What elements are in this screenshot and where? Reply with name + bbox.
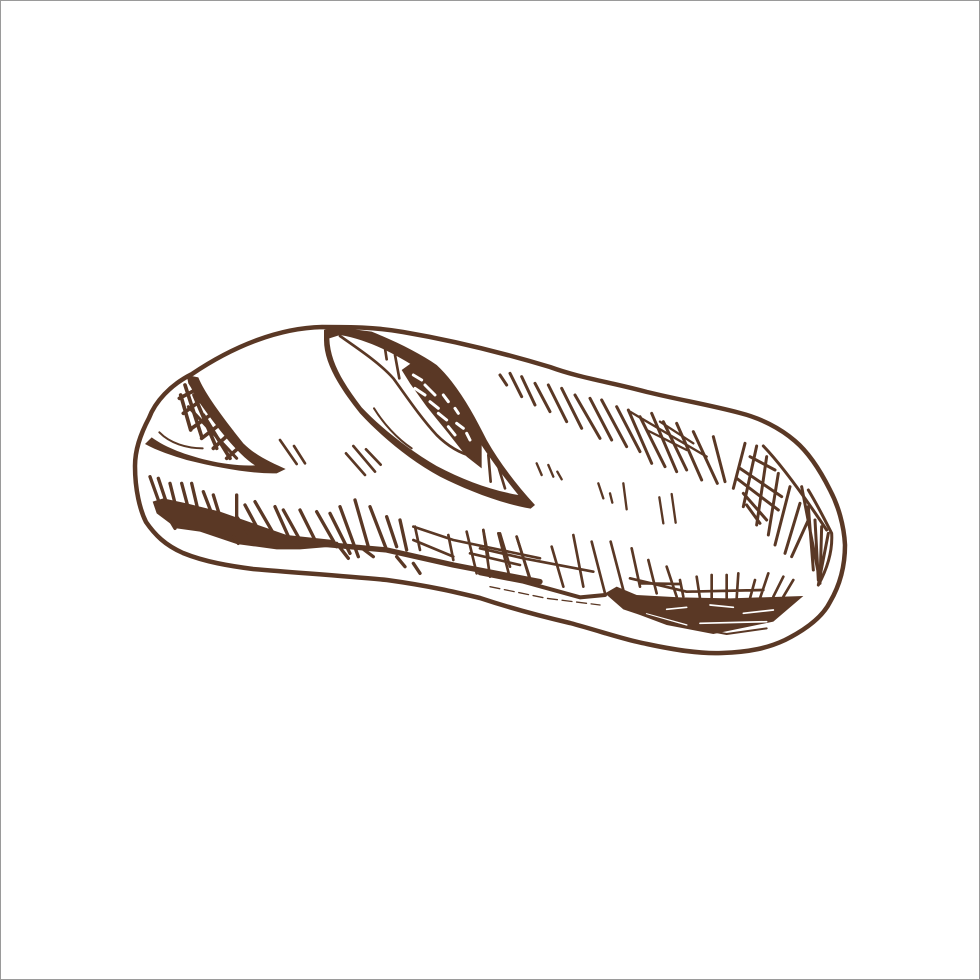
center scoring slash [324,327,535,509]
upper-right crust hatching [500,373,725,523]
left scoring slash [145,375,286,473]
right end hatching [733,443,832,585]
loaf outline [135,327,845,653]
small centre ticks [280,440,381,475]
lower-left crust shading [150,477,540,582]
lower-right crust shading [480,530,803,634]
